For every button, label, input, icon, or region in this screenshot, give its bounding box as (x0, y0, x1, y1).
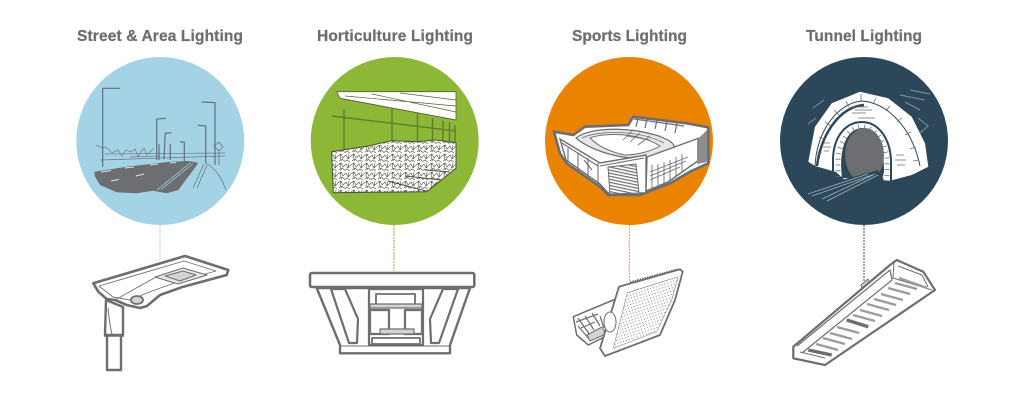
crop rows (332, 140, 456, 193)
column: horticulture lighting (310, 28, 479, 353)
heading: horticulture lighting: Horticulture Lighting (317, 28, 473, 45)
connector line (159, 225, 161, 260)
horizon and scrub (96, 145, 225, 160)
illustration: highway scene in blue circle (76, 57, 244, 225)
product: tunnel linear fixture (793, 260, 935, 365)
connector line (628, 225, 630, 281)
outer arch line (815, 101, 920, 166)
product: sports flood light (573, 269, 683, 356)
heading: street and area lighting: Street & Area Lighting (77, 28, 243, 45)
wispy surroundings (808, 90, 930, 133)
road surface (94, 161, 198, 193)
column: street and area lighting (76, 28, 244, 370)
column: sports lighting (545, 28, 713, 356)
frame openings (331, 289, 358, 343)
LED panel (600, 269, 683, 356)
greenhouse posts and wire (332, 108, 456, 150)
housing (573, 300, 618, 345)
product: street light fixture (93, 256, 228, 370)
portal wall (808, 92, 928, 181)
illustration: tunnel portal in navy circle (780, 57, 948, 225)
brick detail (823, 107, 906, 165)
outer facade (560, 139, 646, 193)
heading: tunnel lighting: Tunnel Lighting (806, 28, 922, 45)
seating bowl (576, 129, 674, 158)
connector line (393, 225, 395, 271)
driver boxes (376, 294, 415, 306)
street lamps (103, 88, 223, 167)
stadium outline (554, 117, 708, 195)
upper stand roof (634, 118, 684, 133)
dark reflector bars (808, 320, 868, 355)
greenhouse roof (337, 92, 456, 120)
product: horticulture fixture (310, 273, 474, 353)
kerb lines (193, 163, 226, 190)
ramp hatch (608, 164, 639, 194)
illustration: greenhouse scene in green circle (311, 57, 479, 225)
side stands (646, 137, 702, 191)
column: tunnel lighting (780, 28, 948, 365)
tunnel opening (841, 128, 884, 180)
mount (861, 279, 870, 289)
connector line (863, 225, 865, 284)
road ground (806, 170, 884, 196)
rail tracks (808, 174, 878, 201)
louvre slats (816, 278, 927, 350)
illustration: stadium in orange circle (545, 57, 713, 225)
inner arch (833, 122, 891, 181)
heat-sink fins (630, 269, 678, 282)
heading: sports lighting: Sports Lighting (572, 28, 687, 45)
